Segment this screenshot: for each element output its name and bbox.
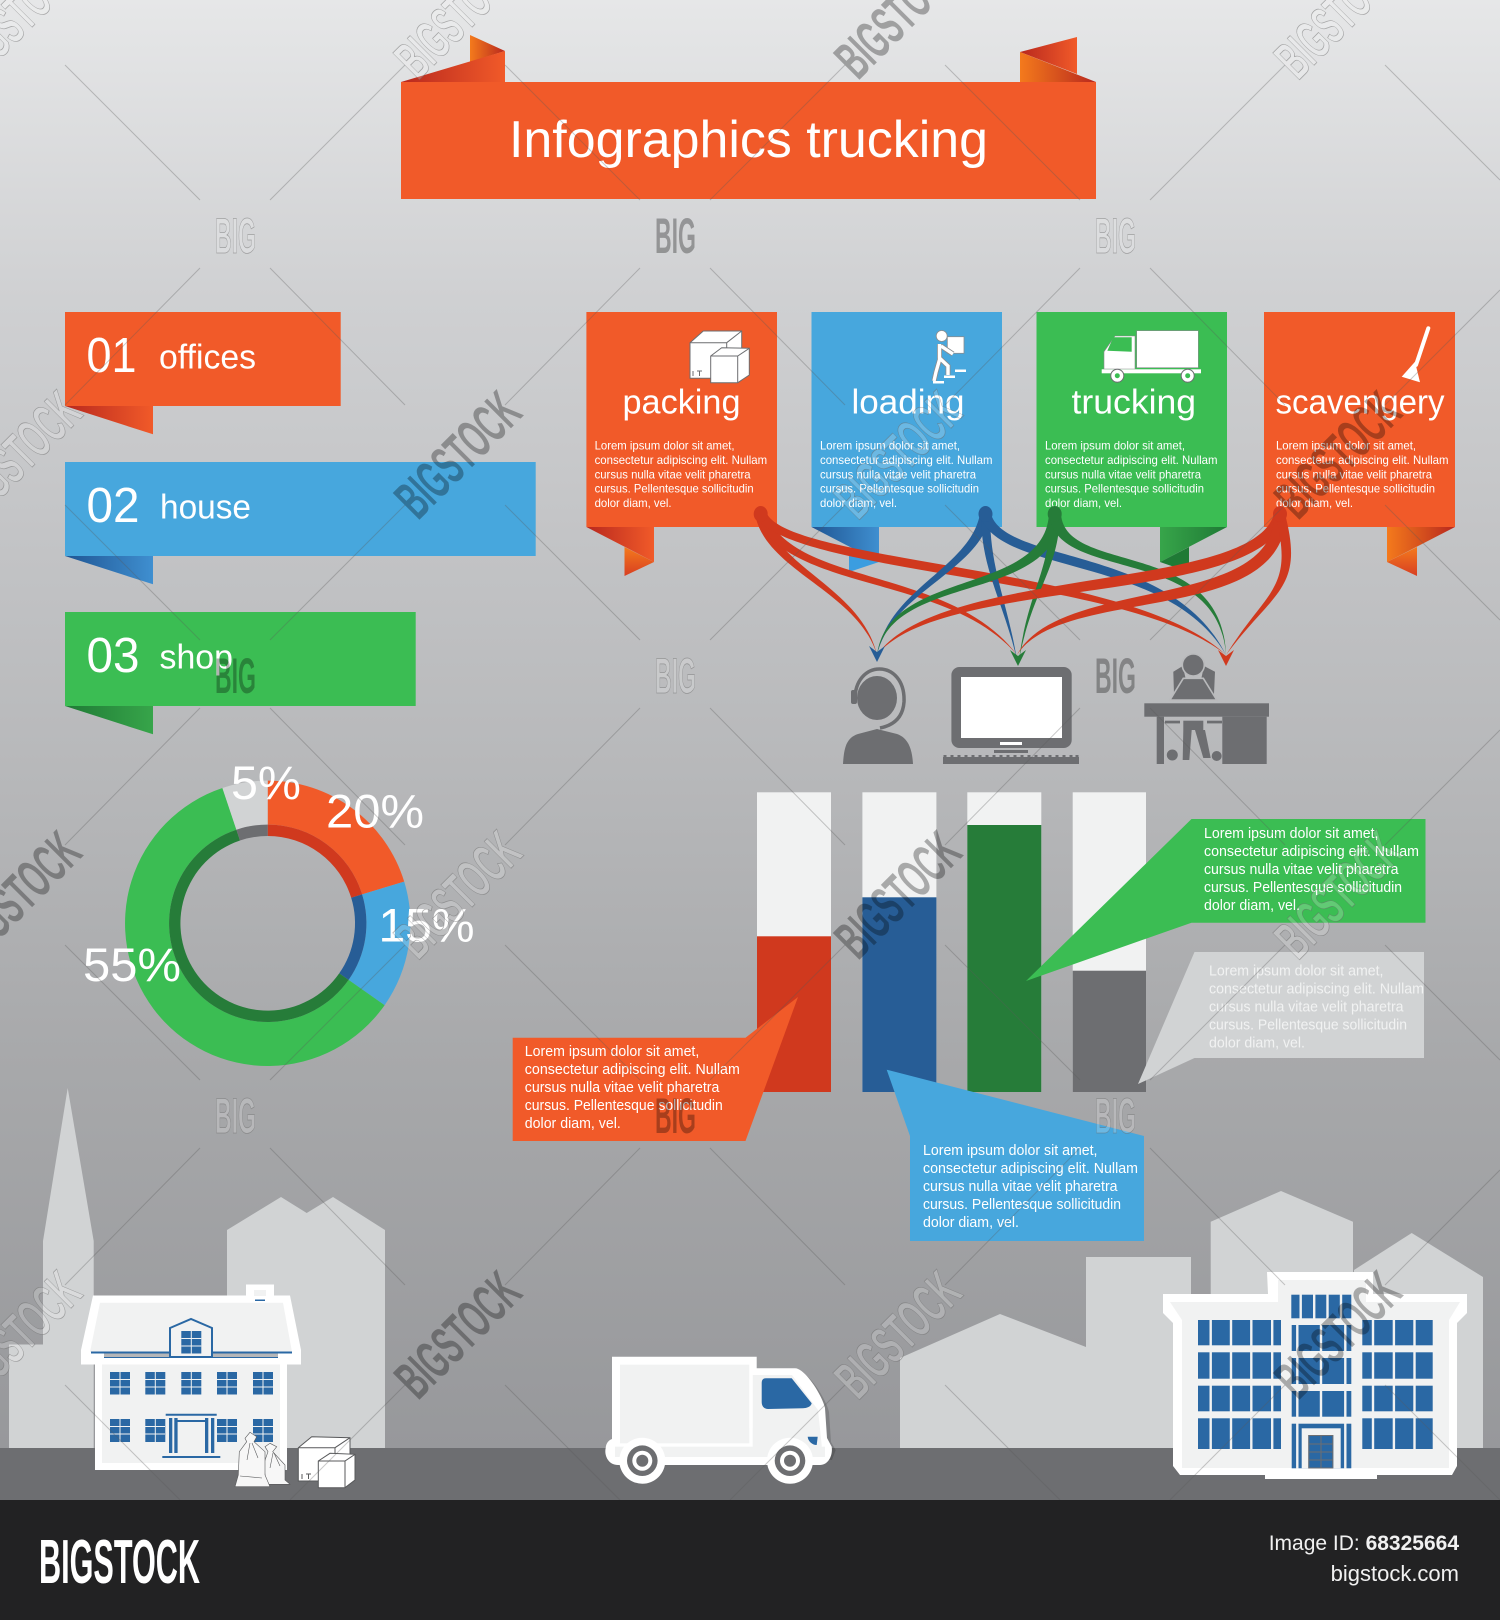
callout grey: cursus nulla vitae velit pharetra (1209, 999, 1404, 1016)
banner: 02 house (65, 462, 536, 584)
green flows from trucking (877, 506, 1226, 660)
banner: 03 shop: 03 (86, 629, 140, 683)
icon: truck (1102, 331, 1201, 382)
text: BIG (1095, 648, 1136, 704)
office building (1163, 1272, 1467, 1479)
church (9, 1088, 94, 1448)
windows left (1198, 1320, 1281, 1449)
window mullions (1211, 1294, 1414, 1469)
panel: trucking (1036, 312, 1227, 572)
site url: bigstock.com (1331, 1561, 1459, 1586)
arrowhead red (1218, 650, 1234, 666)
text: BIG (1095, 1088, 1136, 1144)
windows (110, 1331, 273, 1442)
walls (102, 1364, 280, 1463)
text block: consectetur adipiscing elit. Nullam (595, 453, 767, 467)
text block: consectetur adipiscing elit. Nullam (1276, 453, 1448, 467)
callout green: dolor diam, vel. (1204, 897, 1300, 914)
house (81, 1284, 301, 1470)
cargo panel (620, 1365, 749, 1443)
text block (1276, 438, 1448, 510)
text: BIG (1095, 208, 1136, 264)
eaves (91, 1300, 292, 1358)
low building (900, 1257, 1191, 1448)
callout blue: consectetur adipiscing elit. Nullam (923, 1160, 1138, 1177)
watermark BIG marks: BIG (215, 208, 256, 264)
far building (1354, 1233, 1483, 1448)
peaked building (1211, 1191, 1353, 1448)
watermark BIG marks (215, 208, 1136, 1144)
skirt (615, 1447, 825, 1457)
cab panel (753, 1375, 822, 1457)
bar blue (862, 792, 936, 1092)
callout green: consectetur adipiscing elit. Nullam (1204, 843, 1419, 860)
banner: 03 shop (65, 612, 416, 734)
truck body outline (605, 1357, 832, 1465)
watermark BIGSTOCK marks: BIGSTOCK (383, 820, 533, 970)
text block: Lorem ipsum dolor sit amet, (1045, 438, 1185, 452)
text block: dolor diam, vel. (595, 496, 672, 510)
panel: packing (586, 312, 777, 576)
icon: worker carrying box (933, 330, 966, 384)
text block (820, 438, 992, 510)
bar grey (1073, 792, 1146, 1092)
icon: call operator (843, 669, 913, 764)
banner: 02 house: 02 (86, 479, 140, 533)
panel: trucking: trucking (1072, 384, 1196, 422)
banner: 01 offices (65, 312, 341, 434)
text block: Lorem ipsum dolor sit amet, (1276, 438, 1416, 452)
callout blue: cursus. Pellentesque sollicitudin (923, 1196, 1121, 1213)
banner: 02 house: house (160, 488, 251, 526)
road (0, 1448, 1500, 1500)
segment green 55% (125, 788, 385, 1066)
wheel rear (619, 1438, 665, 1484)
bar red (757, 792, 831, 1092)
text block: Lorem ipsum dolor sit amet, (820, 438, 960, 452)
watermark BIGSTOCK marks: BIGSTOCK (823, 1260, 973, 1410)
bar chart (757, 792, 1146, 1092)
banner: 01 offices: 01 (86, 329, 136, 383)
text block: dolor diam, vel. (1276, 496, 1353, 510)
callout grey: dolor diam, vel. (1209, 1035, 1305, 1052)
footer bar (0, 1500, 1500, 1620)
truck shadow (760, 1372, 836, 1460)
white divider (749, 1364, 753, 1428)
panel: scavengery (1264, 312, 1455, 576)
percentage labels: 5% (231, 756, 301, 809)
dormer (170, 1319, 212, 1357)
icon: desk worker (1144, 654, 1269, 764)
panel: packing: packing (622, 384, 740, 422)
callout grey: consectetur adipiscing elit. Nullam (1209, 981, 1424, 998)
chimney (254, 1290, 266, 1296)
watermark BIG marks: BIG (215, 1088, 256, 1144)
panel: loading (812, 312, 1002, 572)
icon: rubbish bags (235, 1432, 290, 1487)
flow arrows (754, 506, 1291, 666)
watermark BIG marks: BIG (655, 208, 696, 264)
text block: cursus. Pellentesque sollicitudin (1045, 482, 1204, 496)
red flows from scavengery (877, 506, 1291, 655)
watermark BIG marks: BIG (655, 1088, 696, 1144)
text block: cursus. Pellentesque sollicitudin (820, 482, 979, 496)
arrowhead green (1010, 650, 1026, 666)
percentage labels: 20% (326, 785, 424, 838)
entrance (1302, 1428, 1341, 1468)
text block: dolor diam, vel. (1045, 496, 1122, 510)
text block: dolor diam, vel. (820, 496, 897, 510)
headlamp (808, 1437, 818, 1445)
roof (90, 1303, 292, 1352)
left fold (401, 35, 505, 82)
callout grey (1138, 952, 1424, 1084)
callout green: cursus nulla vitae velit pharetra (1204, 861, 1399, 878)
right fold (1020, 37, 1096, 82)
image id: Image ID: 68325664 (1269, 1532, 1459, 1555)
arrowhead blue (869, 646, 885, 662)
callout blue (887, 1070, 1144, 1241)
skyline left (9, 1088, 385, 1448)
callout orange (513, 997, 798, 1141)
callout blue: Lorem ipsum dolor sit amet, (923, 1142, 1098, 1159)
panel: scavengery: scavengery (1276, 384, 1444, 422)
percentage labels: 15% (378, 899, 474, 952)
icon: broom (1402, 328, 1428, 382)
text block: Lorem ipsum dolor sit amet, (595, 438, 735, 452)
icon: boxes (690, 331, 749, 383)
percentage labels (83, 756, 474, 991)
watermark BIGSTOCK marks: BIGSTOCK (383, 380, 533, 530)
windows right (1362, 1320, 1433, 1449)
panel: loading: loading (852, 384, 964, 422)
town building (227, 1197, 385, 1448)
callout grey: cursus. Pellentesque sollicitudin (1209, 1017, 1407, 1034)
text block: cursus nulla vitae velit pharetra (820, 468, 976, 482)
icon: road boxes (298, 1437, 355, 1488)
footer bar: BIGSTOCK (39, 1528, 200, 1597)
bar green (967, 792, 1041, 1092)
callout blue: cursus nulla vitae velit pharetra (923, 1178, 1118, 1195)
text block: consectetur adipiscing elit. Nullam (1045, 453, 1218, 467)
title: Infographics trucking (509, 111, 988, 169)
text block: cursus nulla vitae velit pharetra (1045, 468, 1201, 482)
callout orange: consectetur adipiscing elit. Nullam (525, 1061, 740, 1078)
banner: 03 shop: shop (160, 638, 233, 676)
callout orange: cursus. Pellentesque sollicitudin (525, 1097, 723, 1114)
cab window (762, 1378, 812, 1409)
watermark BIGSTOCK marks: BIGSTOCK (823, 820, 973, 970)
callout orange: cursus nulla vitae velit pharetra (525, 1079, 720, 1096)
callout green: cursus. Pellentesque sollicitudin (1204, 879, 1402, 896)
skyline right (900, 1191, 1483, 1448)
facade (1170, 1280, 1460, 1468)
watermark BIGSTOCK marks: BIGSTOCK (823, 380, 973, 530)
callout blue: dolor diam, vel. (923, 1214, 1019, 1231)
callout green (1026, 819, 1426, 981)
delivery truck (605, 1357, 836, 1484)
windows centre (1291, 1295, 1351, 1468)
text block (1045, 438, 1218, 510)
text block: cursus. Pellentesque sollicitudin (1276, 482, 1435, 496)
callout orange: dolor diam, vel. (525, 1115, 621, 1132)
percentage labels: 55% (83, 938, 181, 991)
watermark BIGSTOCK marks: BIGSTOCK (383, 1260, 533, 1410)
house outline (81, 1284, 301, 1470)
ribbon (401, 82, 1096, 199)
banner: 01 offices: offices (159, 338, 256, 376)
watermark BIG marks: BIG (215, 648, 256, 704)
donut chart (83, 756, 474, 1066)
text block (595, 438, 767, 510)
red flows from packing (754, 506, 1226, 655)
watermark BIG marks: BIG (655, 648, 696, 704)
callout orange: Lorem ipsum dolor sit amet, (525, 1043, 699, 1060)
blue flows from loading (877, 506, 1226, 660)
icon: computer (943, 667, 1079, 764)
segment grey 5% (222, 781, 268, 830)
building outline (1163, 1272, 1467, 1479)
title banner (401, 35, 1096, 199)
text block: cursus nulla vitae velit pharetra (595, 468, 751, 482)
text block: consectetur adipiscing elit. Nullam (820, 453, 992, 467)
segment orange 20% (268, 781, 404, 894)
segment blue 15% (349, 882, 410, 1005)
callout grey: Lorem ipsum dolor sit amet, (1209, 963, 1384, 980)
door (162, 1414, 220, 1458)
text block: cursus. Pellentesque sollicitudin (595, 482, 754, 496)
wheel front (767, 1438, 813, 1484)
inner ring (169, 825, 366, 1022)
callout green: Lorem ipsum dolor sit amet, (1204, 825, 1378, 842)
text block: cursus nulla vitae velit pharetra (1276, 468, 1432, 482)
